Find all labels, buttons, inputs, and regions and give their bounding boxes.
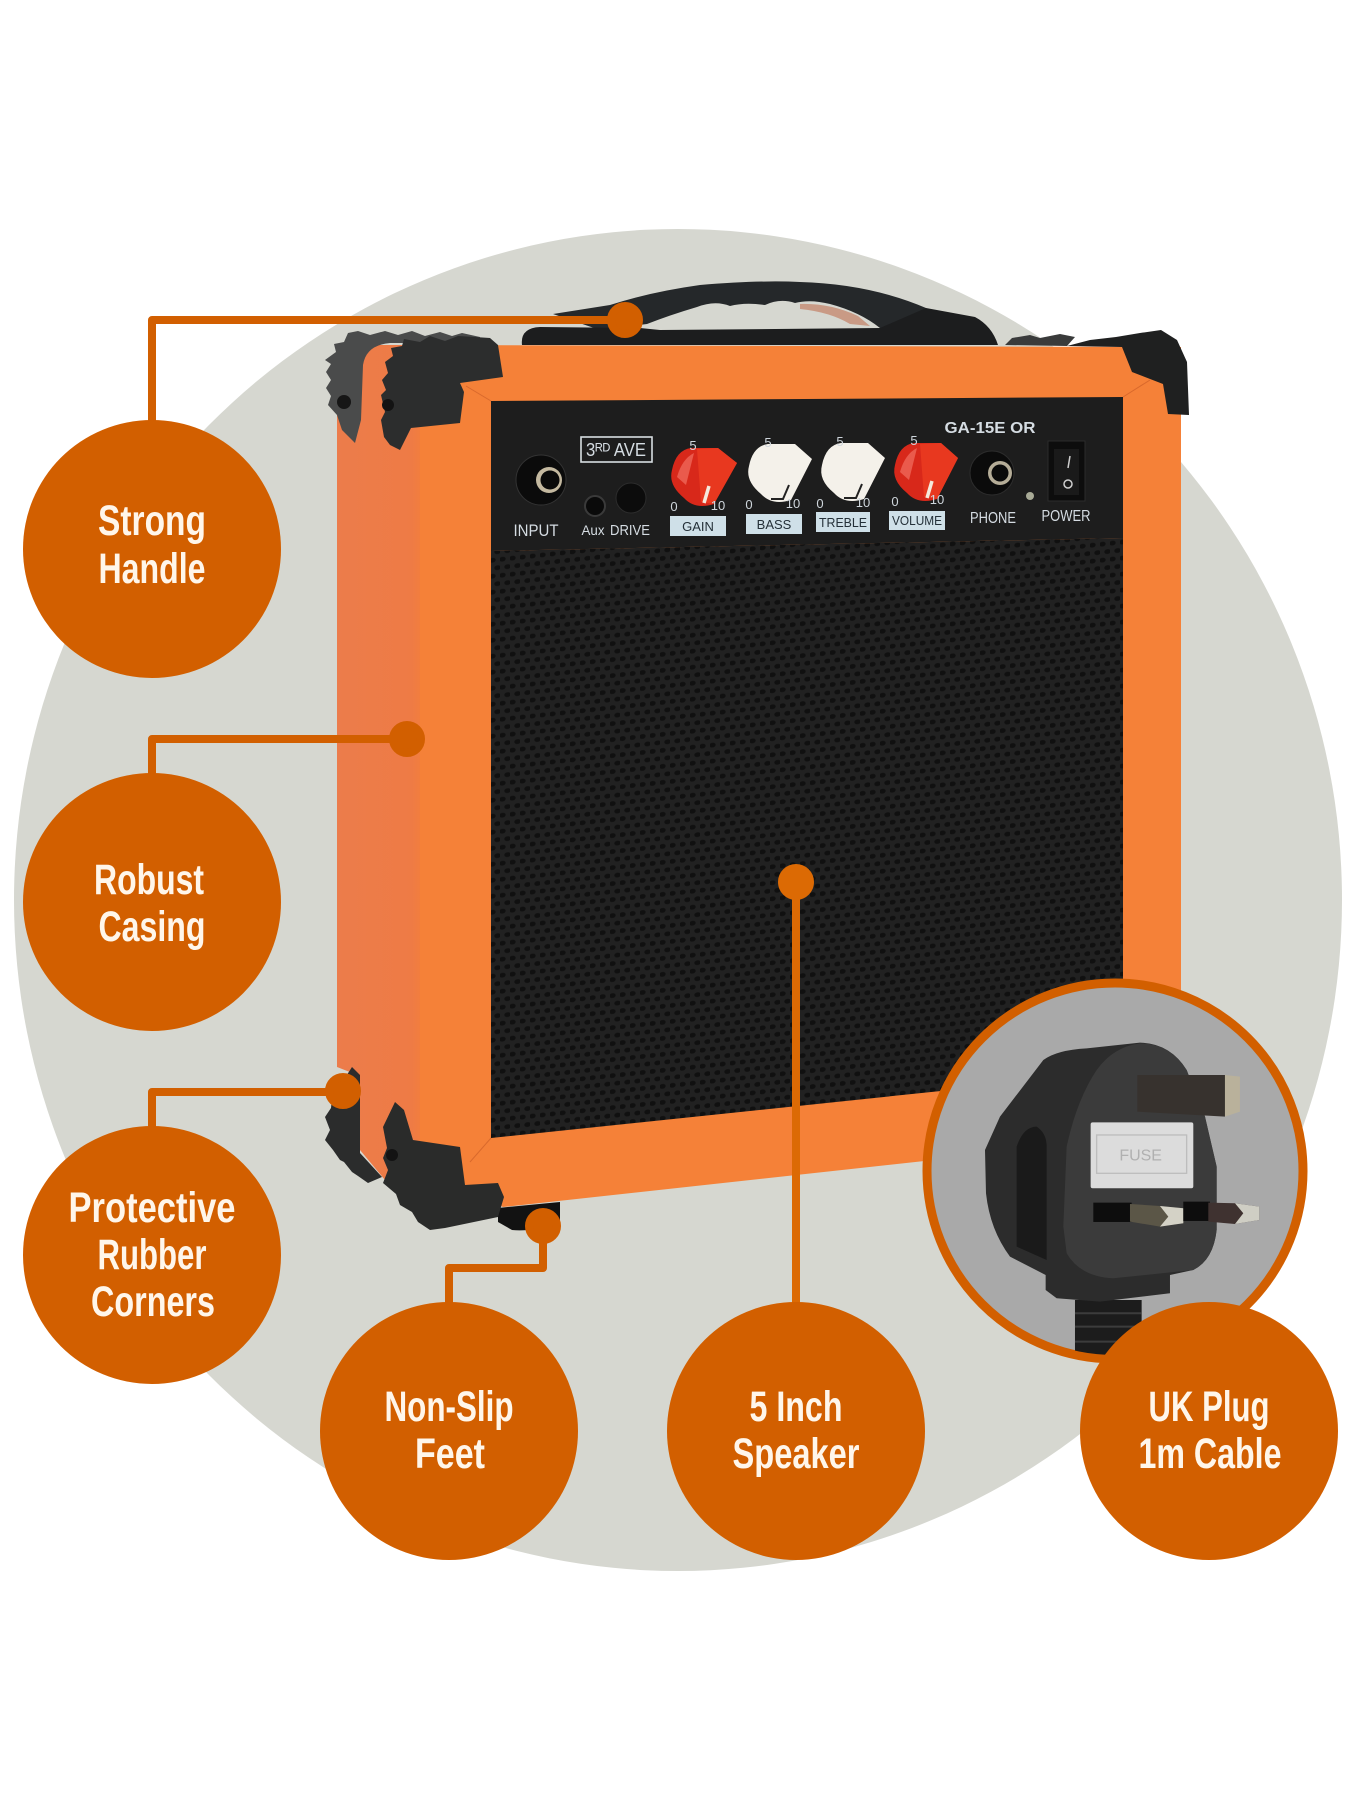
- front rubber corner: bottom-left screw: [386, 1149, 398, 1161]
- phone jack: [970, 451, 1014, 495]
- phone and power labels: POWER: [1042, 508, 1090, 525]
- knob: volume: [894, 443, 958, 501]
- knob: bass: [748, 444, 812, 502]
- frame miter lines: [466, 380, 1150, 1162]
- callout: 5 inch speaker: 5 Inch: [750, 1383, 842, 1431]
- front frame of casing: [420, 345, 1181, 1207]
- phone and power labels: PHONE: [970, 510, 1016, 527]
- control panel: [491, 397, 1123, 551]
- knob scale numbers: 0: [816, 496, 824, 511]
- aux jack: [585, 496, 605, 516]
- foot: [498, 1202, 560, 1230]
- callout: 5 inch speaker: Speaker: [732, 1430, 860, 1478]
- control name tags: [670, 511, 945, 536]
- drive button: [616, 483, 646, 513]
- input labels: DRIVE: [610, 522, 650, 539]
- model number: GA-15E OR: [944, 420, 1036, 437]
- callout: strong handle: Handle: [98, 545, 206, 593]
- leader: non-slip feet: [449, 1212, 557, 1306]
- control name tags: BASS: [757, 517, 792, 532]
- leader: protective corners: [152, 1077, 357, 1130]
- input jack: [516, 455, 566, 505]
- rear rubber corner: bottom: [325, 1067, 382, 1183]
- knob scale numbers: 5: [764, 435, 772, 450]
- front rubber corner: top right: [1067, 330, 1189, 415]
- rear rubber corner: top: [325, 331, 480, 443]
- leader: speaker: [782, 868, 810, 1306]
- control name tags: GAIN: [682, 519, 714, 534]
- knob scale numbers: 10: [856, 495, 870, 510]
- callout: protective rubber corners: [23, 1126, 281, 1384]
- plug body: [985, 1043, 1217, 1302]
- grip groove: [1017, 1127, 1047, 1260]
- inset: UK plug: [927, 983, 1303, 1360]
- control name tags: TREBLE: [819, 515, 867, 530]
- callout: protective rubber corners: Corners: [91, 1278, 215, 1326]
- leader: robust casing: [152, 725, 421, 778]
- callout: non-slip feet: Feet: [415, 1430, 485, 1478]
- knob scale numbers: 5: [836, 434, 844, 449]
- knob scale numbers: 0: [670, 499, 678, 514]
- callout: robust casing: Robust: [94, 856, 204, 904]
- power switch: [1048, 441, 1085, 501]
- phone and power labels: [970, 508, 1090, 527]
- knob scale numbers: 0: [745, 497, 753, 512]
- callout: 5 inch speaker: [667, 1302, 925, 1560]
- front rubber corner: bottom left: [383, 1102, 504, 1230]
- neutral pin: [1183, 1202, 1210, 1221]
- live pin: [1093, 1203, 1132, 1222]
- callout: non-slip feet: Non-Slip: [384, 1383, 514, 1431]
- led: [1026, 492, 1034, 500]
- plug photo: [985, 1043, 1259, 1360]
- side panel of casing: [337, 345, 425, 1205]
- callout: UK plug 1m cable: UK Plug: [1148, 1383, 1270, 1431]
- knob scale numbers: 10: [786, 496, 800, 511]
- callout: strong handle: Strong: [98, 497, 206, 545]
- handle: [522, 281, 998, 345]
- knob scale numbers: 10: [711, 498, 725, 513]
- callout: UK plug 1m cable: [1080, 1302, 1338, 1560]
- callout: UK plug 1m cable: 1m Cable: [1138, 1430, 1282, 1478]
- callout: non-slip feet: [320, 1302, 578, 1560]
- front rubber corner: top left: [381, 336, 503, 450]
- front rubber corner: top-left screw: [382, 399, 394, 411]
- input labels: INPUT: [514, 521, 558, 540]
- rear rubber corner: screw: [337, 395, 351, 409]
- earth pin: [1137, 1075, 1225, 1117]
- rear rubber corner: right strip: [1005, 334, 1075, 346]
- inset ring: [927, 983, 1303, 1359]
- leader: strong handle: [152, 306, 639, 425]
- product: guitar amplifier: [325, 281, 1189, 1230]
- plug photo: FUSE: [1119, 1148, 1162, 1165]
- knob: gain: [671, 448, 737, 506]
- brand logo: 3ᴿᴰ AVE: [586, 440, 646, 460]
- control name tags: VOLUME: [892, 513, 942, 528]
- knob scale numbers: 5: [910, 433, 918, 448]
- input labels: Aux: [582, 522, 604, 538]
- input labels: [514, 521, 650, 540]
- knob scale numbers: [670, 433, 944, 514]
- knob scale numbers: 0: [891, 494, 899, 509]
- callout: strong handle: [23, 420, 281, 678]
- callout: robust casing: Casing: [98, 903, 206, 951]
- background circle: [14, 229, 1342, 1571]
- cable: [1075, 1300, 1142, 1360]
- callout: robust casing: [23, 773, 281, 1031]
- speaker grille: [491, 538, 1123, 1138]
- knob scale numbers: 10: [930, 492, 944, 507]
- callout: protective rubber corners: Rubber: [98, 1231, 207, 1279]
- knob scale numbers: 5: [689, 438, 697, 453]
- callout: protective rubber corners: Protective: [68, 1184, 236, 1232]
- fuse cover: [1091, 1122, 1193, 1188]
- plug face: [1063, 1043, 1217, 1278]
- knob: treble: [821, 443, 885, 501]
